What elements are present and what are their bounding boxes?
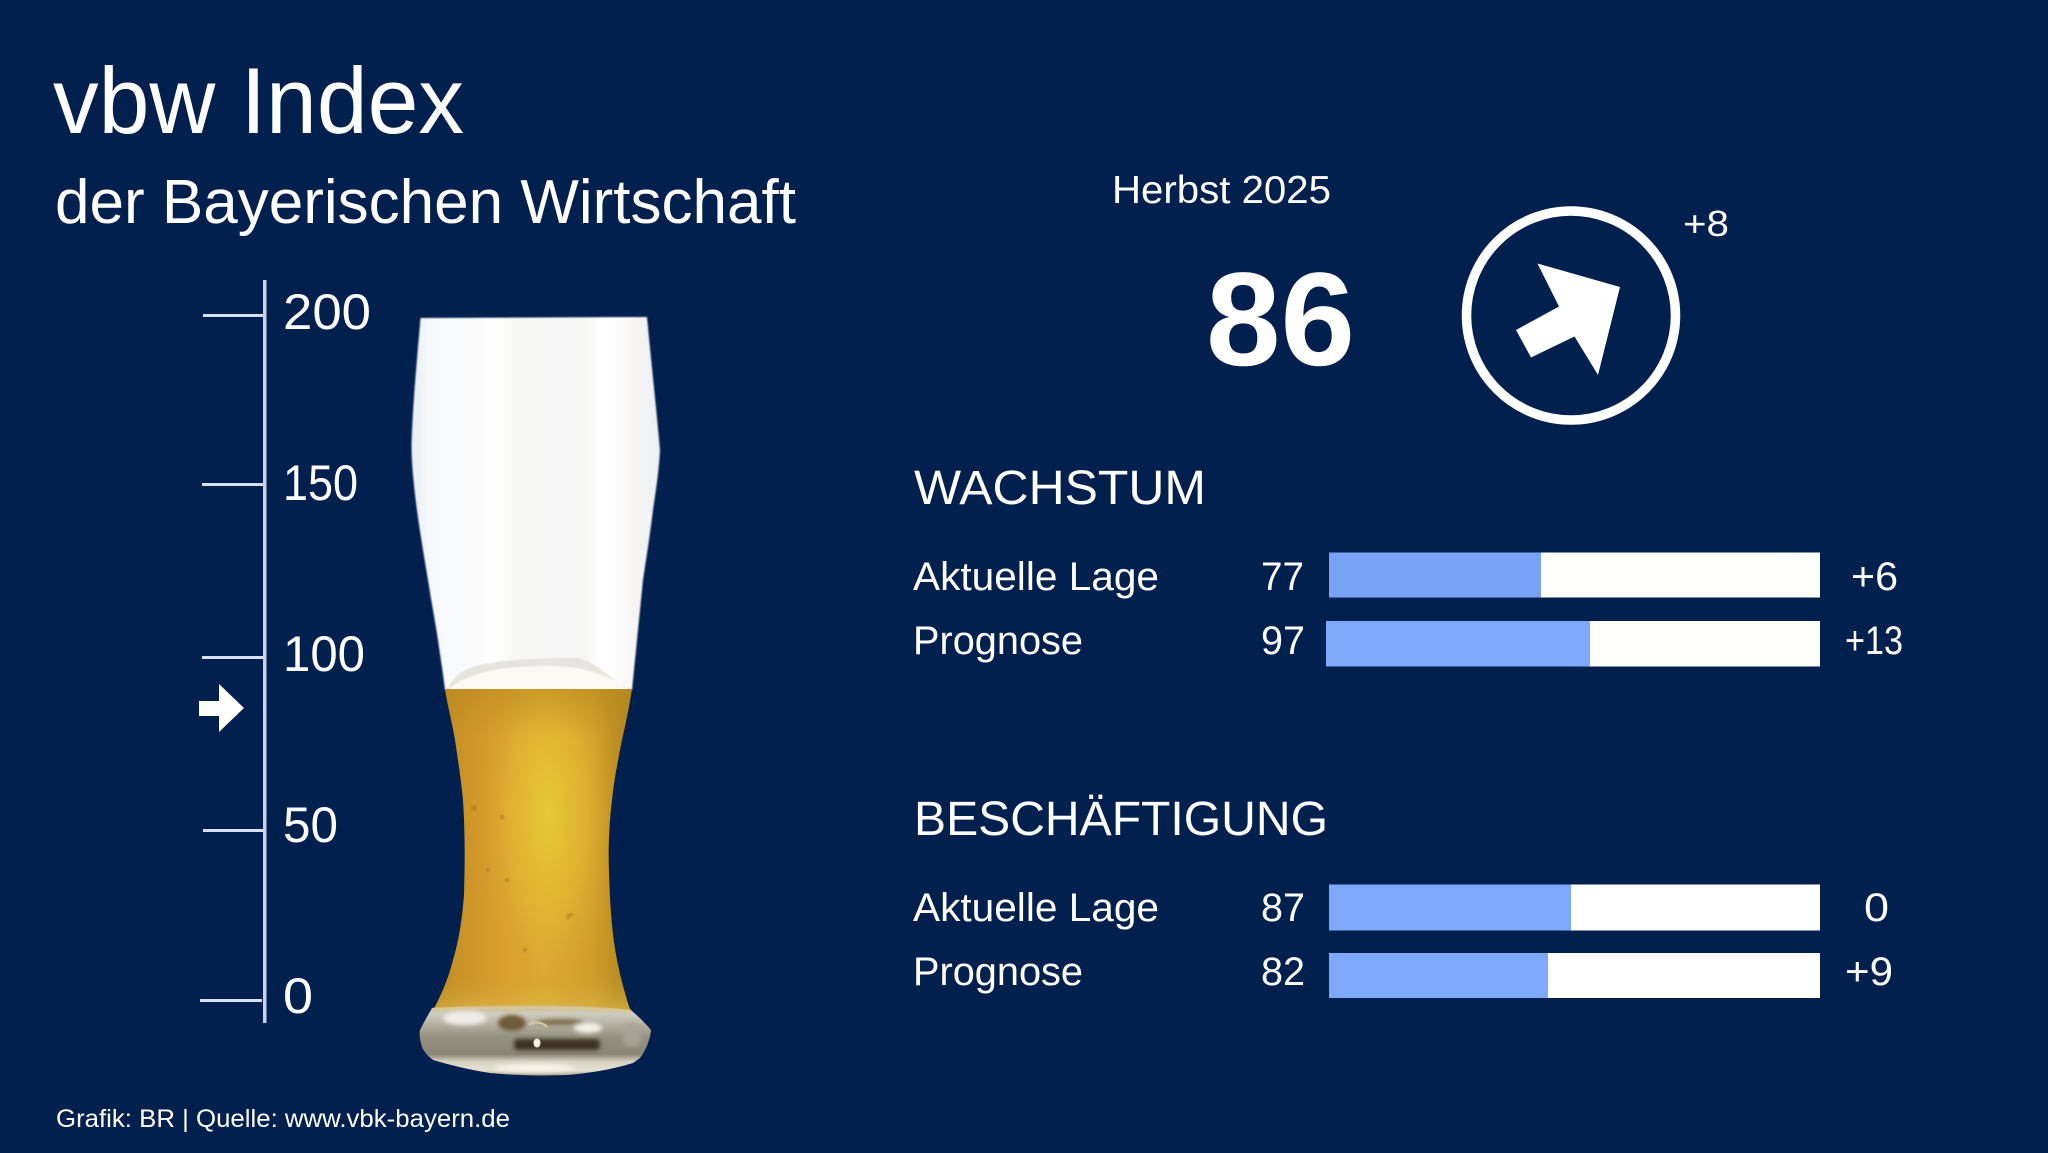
icon: current value arrow on scale [199,684,244,732]
row: Aktuelle Lage 77 +6: 77 [1261,555,1304,599]
row: Prognose 97 +13: 97 [1261,619,1305,663]
row: Aktuelle Lage 87 0: 0 [1864,886,1889,930]
overall index value: 86 [1206,246,1355,394]
overall change value: +8 [1683,203,1729,244]
heading: Wachstum: WACHSTUM [914,462,1206,515]
row: Aktuelle Lage 87 0: 87 [1261,886,1305,930]
row: Prognose 82 +9: +9 [1845,950,1893,994]
row: Prognose 97 +13: +13 [1845,619,1903,663]
scale axis with ticks and labels: 100 [283,626,365,682]
title: vbw Index [53,48,464,153]
scale axis with ticks and labels: 200 [283,284,371,340]
panel: Wachstum [913,462,1903,666]
heading: Beschäftigung: BESCHÄFTIGUNG [914,793,1328,846]
scale axis with ticks and labels: 50 [283,797,338,853]
panel: Beschäftigung [913,793,1893,998]
scale axis with ticks and labels [200,280,371,1024]
icon: circled up-right arrow [1466,211,1676,420]
row: Prognose 97 +13: Prognose [913,619,1083,663]
glass empty white upper part [412,317,660,690]
source footer: Grafik: BR | Quelle: www.vbk-bayern.de [56,1105,510,1133]
row: Aktuelle Lage 87 0 [913,884,1889,930]
row: Prognose 97 +13 [913,619,1903,666]
row: Prognose 82 +9: 82 [1261,950,1305,994]
row: Prognose 82 +9 [913,950,1893,998]
row: Aktuelle Lage 77 +6: +6 [1851,555,1898,599]
row: Aktuelle Lage 77 +6 [913,552,1898,599]
row: Aktuelle Lage 87 0: Aktuelle Lage [913,886,1159,930]
row: Aktuelle Lage 77 +6: Aktuelle Lage [913,555,1159,599]
foam [447,658,630,689]
period label: Herbst 2025 [1112,169,1331,212]
beer glass [412,317,660,1075]
scale axis with ticks and labels: 0 [283,968,313,1024]
glass base [420,1005,651,1075]
row: Prognose 82 +9: Prognose [913,950,1083,994]
subtitle: der Bayerischen Wirtschaft [55,168,796,237]
scale axis with ticks and labels: 150 [283,455,358,511]
beer body [432,689,632,1012]
